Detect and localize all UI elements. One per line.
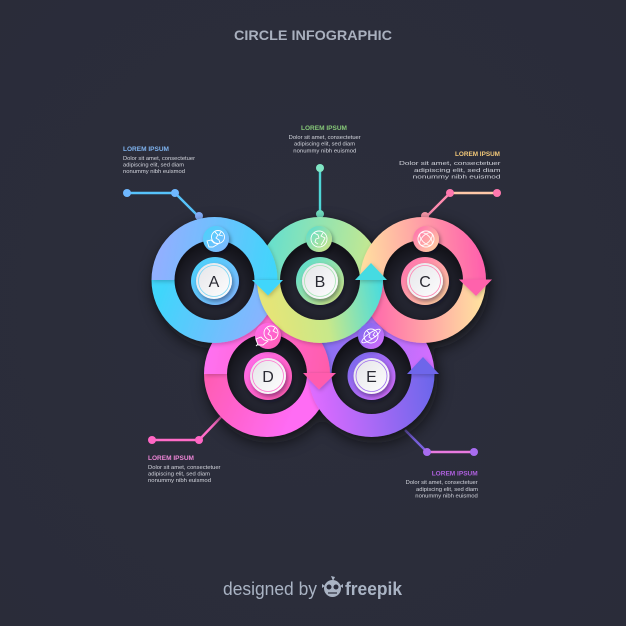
text block A: Dolor sit amet, consectetuer (123, 156, 195, 162)
icon: hand holding globe A (203, 226, 229, 252)
ring B upper arc (257, 217, 383, 280)
center disc A: A (209, 274, 220, 291)
ring A upper arc (152, 217, 278, 280)
footer credit: designed by (223, 579, 317, 599)
center disc D: D (262, 369, 274, 386)
text block C: Dolor sit amet, consectetuer (399, 161, 501, 167)
text block D: nonummy nibh euismod (148, 478, 211, 484)
text block A (123, 146, 195, 175)
connector A (123, 189, 203, 220)
ring cast shadows (154, 223, 489, 443)
text block A: LOREM IPSUM (123, 146, 169, 153)
icon: wire globe C (413, 226, 439, 252)
arrow E (407, 357, 439, 374)
icon: orbit globe E (358, 323, 384, 349)
center disc C (401, 257, 449, 305)
text block D: LOREM IPSUM (148, 455, 194, 462)
text block D: Dolor sit amet, consectetuer (148, 465, 221, 471)
icon: freepik mascot (322, 576, 343, 597)
text block A: nonummy nibh euismod (123, 169, 185, 175)
text block C: nonummy nibh euismod (413, 174, 500, 180)
arrow C (459, 280, 492, 296)
center disc E (348, 352, 396, 400)
ring C lower arc (360, 280, 486, 343)
ring E lower arc (308, 374, 434, 437)
text block E (406, 470, 478, 500)
text block B: LOREM IPSUM (301, 125, 347, 132)
ring D upper arc (204, 311, 330, 374)
ring B lower arc (257, 280, 383, 343)
center disc A (191, 257, 239, 305)
connector B (316, 164, 324, 218)
arrow B (355, 263, 387, 280)
arrow A (252, 280, 283, 296)
text block B: adipiscing elit, sed diam (294, 142, 355, 148)
connector D (148, 416, 222, 444)
center disc D (244, 352, 292, 400)
arrow D (303, 373, 336, 390)
center disc B (296, 257, 344, 305)
ring A lower arc (152, 280, 278, 343)
text block E: nonummy nibh euismod (415, 494, 478, 500)
footer credit: freepik (345, 579, 403, 599)
title: CIRCLE INFOGRAPHIC (234, 27, 392, 43)
text block E: adipiscing elit, sed diam (416, 487, 478, 493)
text block E: Dolor sit amet, consectetuer (406, 480, 478, 486)
center disc C: C (419, 274, 431, 291)
text block D (148, 455, 221, 484)
ring holes (174, 240, 463, 414)
footer credit (223, 576, 403, 599)
text block C: LOREM IPSUM (455, 151, 500, 158)
text block B: nonummy nibh euismod (293, 148, 356, 154)
ring D lower arc (204, 374, 330, 437)
text block E: LOREM IPSUM (432, 470, 478, 478)
ring E upper arc (308, 311, 434, 374)
ring C upper arc (360, 217, 486, 280)
text block B: Dolor sit amet, consectetuer (289, 135, 361, 141)
icon: globe B (306, 226, 332, 252)
connector C (421, 189, 501, 220)
text block C: adipiscing elit, sed diam (414, 168, 501, 174)
center disc B: B (315, 274, 325, 291)
connector E (405, 430, 478, 456)
text block D: adipiscing elit, sed diam (148, 472, 210, 478)
text block A: adipiscing elit, sed diam (123, 162, 184, 168)
icon: hand holding globe D (255, 323, 281, 349)
text block B (289, 125, 361, 154)
center disc E: E (366, 369, 377, 386)
text block C (399, 151, 501, 180)
